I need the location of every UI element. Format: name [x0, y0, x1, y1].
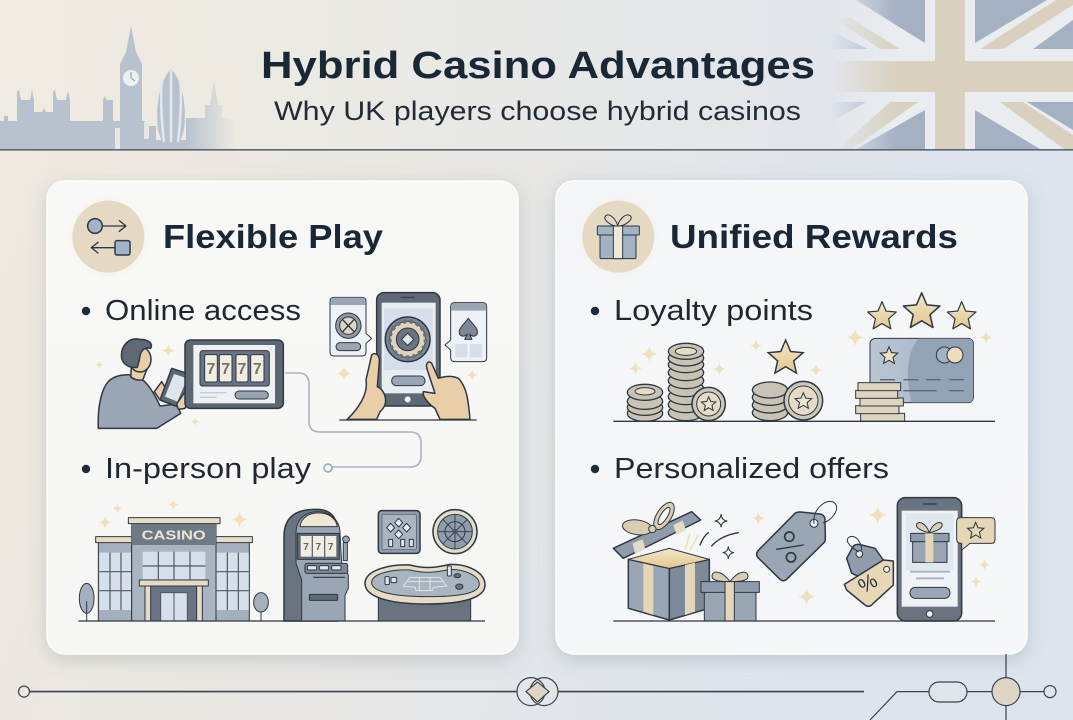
slot machine	[284, 509, 349, 621]
bullet: in-person play: In-person play	[105, 453, 312, 485]
illustration: loyalty points	[613, 293, 995, 421]
skyline of London	[0, 26, 238, 149]
large tablet with slot reels	[185, 340, 283, 408]
large tablet with slot reels: 7	[207, 361, 216, 378]
connector line	[285, 373, 421, 467]
app card: roulette	[330, 297, 372, 356]
bullet: personalized offers: Personalized offers	[614, 453, 889, 485]
hands holding phone	[339, 354, 477, 420]
sparkles	[629, 328, 993, 376]
trees	[79, 583, 268, 621]
bullet: loyalty points: Loyalty points	[614, 295, 813, 327]
ground line	[78, 619, 485, 623]
slot machine: 7	[303, 542, 309, 553]
header band	[0, 0, 1073, 151]
subtitle: Why UK players choose hybrid casinos	[274, 96, 801, 126]
heading: flexible play: Flexible Play	[163, 218, 384, 255]
end node	[1044, 686, 1056, 698]
chip panel icon	[378, 511, 420, 553]
ground line	[613, 419, 995, 423]
card table	[365, 564, 485, 621]
casino building	[96, 518, 252, 621]
venn diamond node	[517, 678, 558, 706]
icon: gift	[577, 195, 660, 278]
illustration: land casino	[78, 499, 485, 621]
pill node	[929, 682, 967, 702]
small gift box	[701, 572, 759, 621]
coin stack with star	[752, 340, 823, 421]
large tablet with slot reels: 7	[221, 361, 230, 378]
footer timeline	[18, 654, 1056, 720]
phone with roulette wheel	[377, 293, 440, 406]
casino building: CASINO	[142, 527, 206, 542]
slot machine: 7	[316, 542, 322, 553]
roulette wheel	[433, 510, 477, 554]
panel: flexible play	[47, 181, 518, 654]
title: Hybrid Casino Advantages	[261, 45, 815, 87]
large tablet with slot reels: 7	[238, 361, 247, 378]
slot machine: 7	[328, 542, 334, 553]
open gift box	[613, 499, 738, 620]
sparkles	[95, 344, 478, 426]
illustration: personalized offers	[613, 498, 995, 621]
connector end dot	[324, 464, 332, 472]
star coin	[692, 387, 725, 421]
phone with gift	[897, 498, 962, 621]
bullet: online access: Online access	[105, 295, 301, 327]
start node	[18, 686, 30, 697]
ground line	[613, 619, 995, 623]
heading: unified rewards: Unified Rewards	[670, 218, 958, 255]
speech bubble with star	[957, 518, 995, 550]
large node	[992, 678, 1020, 706]
loyalty card	[870, 338, 973, 403]
coin stack: short	[627, 384, 663, 421]
percent tags small: %	[854, 569, 882, 598]
coin stack: tall	[668, 343, 704, 421]
flat coin pile	[856, 383, 905, 421]
large tablet with slot reels: 7	[253, 361, 262, 378]
percent tag large	[757, 501, 837, 581]
person with tablet	[98, 339, 192, 428]
header rule	[0, 149, 1073, 151]
sparkles	[752, 505, 990, 606]
sparkles	[98, 499, 248, 529]
icon: flexible play arrows	[67, 195, 150, 278]
percent tags small	[844, 536, 893, 606]
stars above card	[868, 293, 976, 329]
illustration: online play	[95, 293, 487, 428]
app card: spade	[445, 303, 487, 362]
Union Jack flag	[820, 0, 1073, 149]
panel: unified rewards	[556, 181, 1027, 654]
